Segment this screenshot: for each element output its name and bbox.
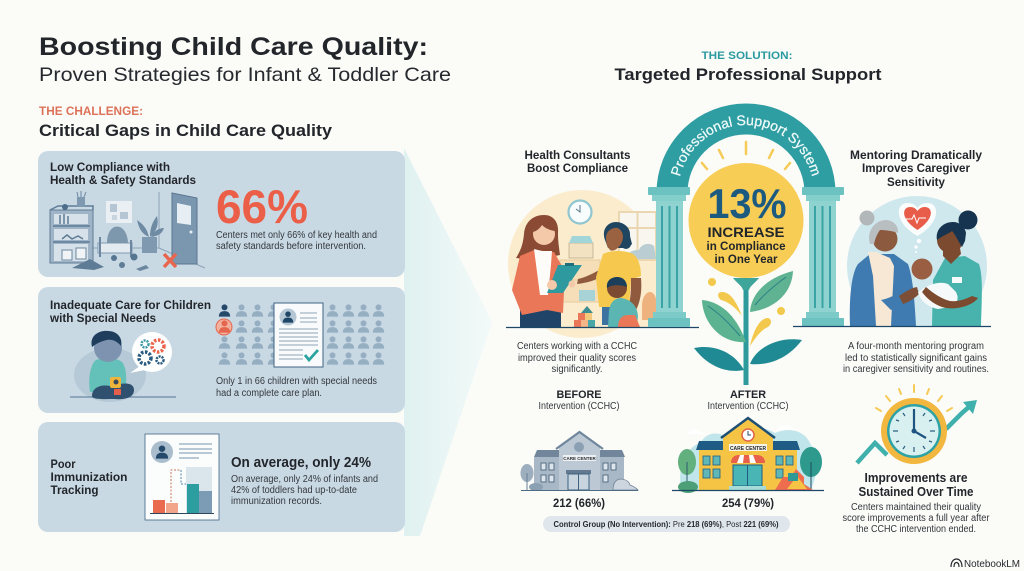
icon: care plan document xyxy=(274,303,323,367)
icon: heart with pulse xyxy=(899,203,936,253)
sun rays xyxy=(702,142,790,169)
text block: care plan detail: had a complete care plan. xyxy=(216,388,322,399)
column heading: mentoring: Mentoring Dramatically xyxy=(850,150,983,162)
illustration: professional support arch xyxy=(648,104,844,327)
callout: 13% increase xyxy=(688,163,804,278)
label: after xyxy=(708,389,788,412)
plant growing from stat xyxy=(694,271,802,385)
text block: mentoring outcomes: led to statistically significant gains xyxy=(845,353,987,364)
panel heading: special needs: with Special Needs xyxy=(49,313,156,325)
label: after: AFTER xyxy=(730,389,766,401)
text block: mentoring outcomes: A four-month mentoring program xyxy=(848,341,984,352)
column heading: sustained improvements xyxy=(858,471,974,499)
heading: the challenge xyxy=(39,104,333,140)
icon: clock with rising arrow xyxy=(857,385,977,464)
text block: care plan detail: Only 1 in 66 children with special needs xyxy=(216,376,377,387)
callout: control group: Control Group (No Intervention): Pre 218 (69%), Post 221 (69%) xyxy=(554,520,779,529)
heading: the challenge: THE CHALLENGE: xyxy=(39,104,143,118)
right column xyxy=(802,187,844,327)
stat: 66%: 66% xyxy=(216,180,308,233)
panel: special needs xyxy=(38,287,405,413)
text block: compliance detail xyxy=(216,230,377,252)
label: before: Intervention (CCHC) xyxy=(538,401,620,412)
heading: the solution: THE SOLUTION: xyxy=(702,50,792,62)
panel heading: immunization: Poor xyxy=(50,459,76,471)
text block: immunization detail: On average, only 24% of infants and xyxy=(231,474,378,485)
text block: sustained improvements: Centers maintained their quality xyxy=(851,502,981,513)
panel heading: immunization: Immunization xyxy=(50,472,128,484)
text block: immunization detail xyxy=(231,474,378,507)
text block: compliance detail: safety standards before intervention. xyxy=(216,241,366,252)
text block: immunization detail: immunization records. xyxy=(231,496,322,507)
stat: on average 24%: On average, only 24% xyxy=(231,455,371,471)
column heading: mentoring xyxy=(850,150,983,189)
text block: mentoring outcomes xyxy=(843,341,989,375)
illustration: consultant with caregiver and child xyxy=(506,190,699,338)
column heading: mentoring: Sensitivity xyxy=(887,177,946,189)
heading: the solution xyxy=(614,50,882,84)
callout: control group xyxy=(543,516,790,532)
text block: care plan detail xyxy=(216,376,377,399)
column heading: health consultants: Boost Compliance xyxy=(527,163,628,175)
label: after: Intervention (CCHC) xyxy=(708,401,788,412)
panel: low compliance xyxy=(38,151,405,277)
icon: care center after: CARE CENTER xyxy=(730,446,766,452)
text block: immunization detail: 42% of toddlers had up-to-date xyxy=(231,485,357,496)
icon: care center after xyxy=(672,418,824,493)
title xyxy=(39,33,451,86)
panel heading: immunization: Tracking xyxy=(50,485,98,497)
arrow connecting challenge to solution xyxy=(404,148,492,536)
callout: 13% increase: in One Year xyxy=(714,252,778,266)
callout: 13% increase: INCREASE xyxy=(708,224,784,240)
text block: CCHC outcomes: Centers working with a CCHC xyxy=(517,341,637,352)
text block: CCHC outcomes: improved their quality scores xyxy=(518,353,636,364)
illustration: mentor and caregiver with baby xyxy=(793,196,991,326)
column heading: sustained improvements: Improvements are xyxy=(864,471,968,485)
panel: immunization xyxy=(38,422,405,532)
text block: compliance detail: Centers met only 66% of key health and xyxy=(216,230,377,241)
column heading: health consultants: Health Consultants xyxy=(524,150,630,162)
icon: immunization record with bars xyxy=(145,434,219,520)
text block: CCHC outcomes: significantly. xyxy=(552,364,602,375)
heading: the challenge: Critical Gaps in Child Care Quality xyxy=(39,121,333,140)
panel heading: special needs: Inadequate Care for Children xyxy=(50,300,211,312)
panel heading: low compliance: Low Compliance with xyxy=(50,162,170,174)
panel heading: special needs xyxy=(49,300,211,325)
title: Boosting Child Care Quality: xyxy=(39,33,428,61)
label: before: BEFORE xyxy=(556,389,602,401)
stat: after score: 254 (79%) xyxy=(722,496,774,510)
logo: NotebookLM: NotebookLM xyxy=(964,558,1020,570)
column heading: sustained improvements: Sustained Over Time xyxy=(858,485,974,499)
text block: mentoring outcomes: in caregiver sensitivity and routines. xyxy=(843,364,989,375)
chart: 1 in 66 children pictogram xyxy=(216,304,384,365)
heading: the solution: Targeted Professional Support xyxy=(614,65,882,84)
column heading: mentoring: Improves Caregiver xyxy=(862,163,971,175)
left column xyxy=(648,187,690,327)
arch band with label xyxy=(656,104,836,187)
icon: care center before xyxy=(520,432,638,491)
stat: before score: 212 (66%) xyxy=(553,496,605,510)
panel heading: low compliance: Health & Safety Standards xyxy=(50,175,196,187)
callout: 13% increase: in Compliance xyxy=(706,239,786,253)
panel heading: immunization xyxy=(50,459,128,497)
icon: unsafe room xyxy=(50,191,205,271)
text block: sustained improvements: the CCHC intervention ended. xyxy=(856,524,976,535)
label: before xyxy=(538,389,620,412)
icon: care center before: CARE CENTER xyxy=(563,456,596,461)
callout: 13% increase: 13% xyxy=(708,180,786,227)
text block: sustained improvements xyxy=(842,502,990,535)
icon: child playing with thought bubble xyxy=(70,331,176,402)
panel heading: low compliance xyxy=(50,162,196,187)
text block: sustained improvements: score improvements a full year after xyxy=(842,513,990,524)
title: Proven Strategies for Infant & Toddler Care xyxy=(39,64,451,86)
text block: CCHC outcomes xyxy=(517,341,637,375)
column heading: health consultants xyxy=(524,150,630,175)
arch band with label: Professional Support System xyxy=(670,115,819,176)
